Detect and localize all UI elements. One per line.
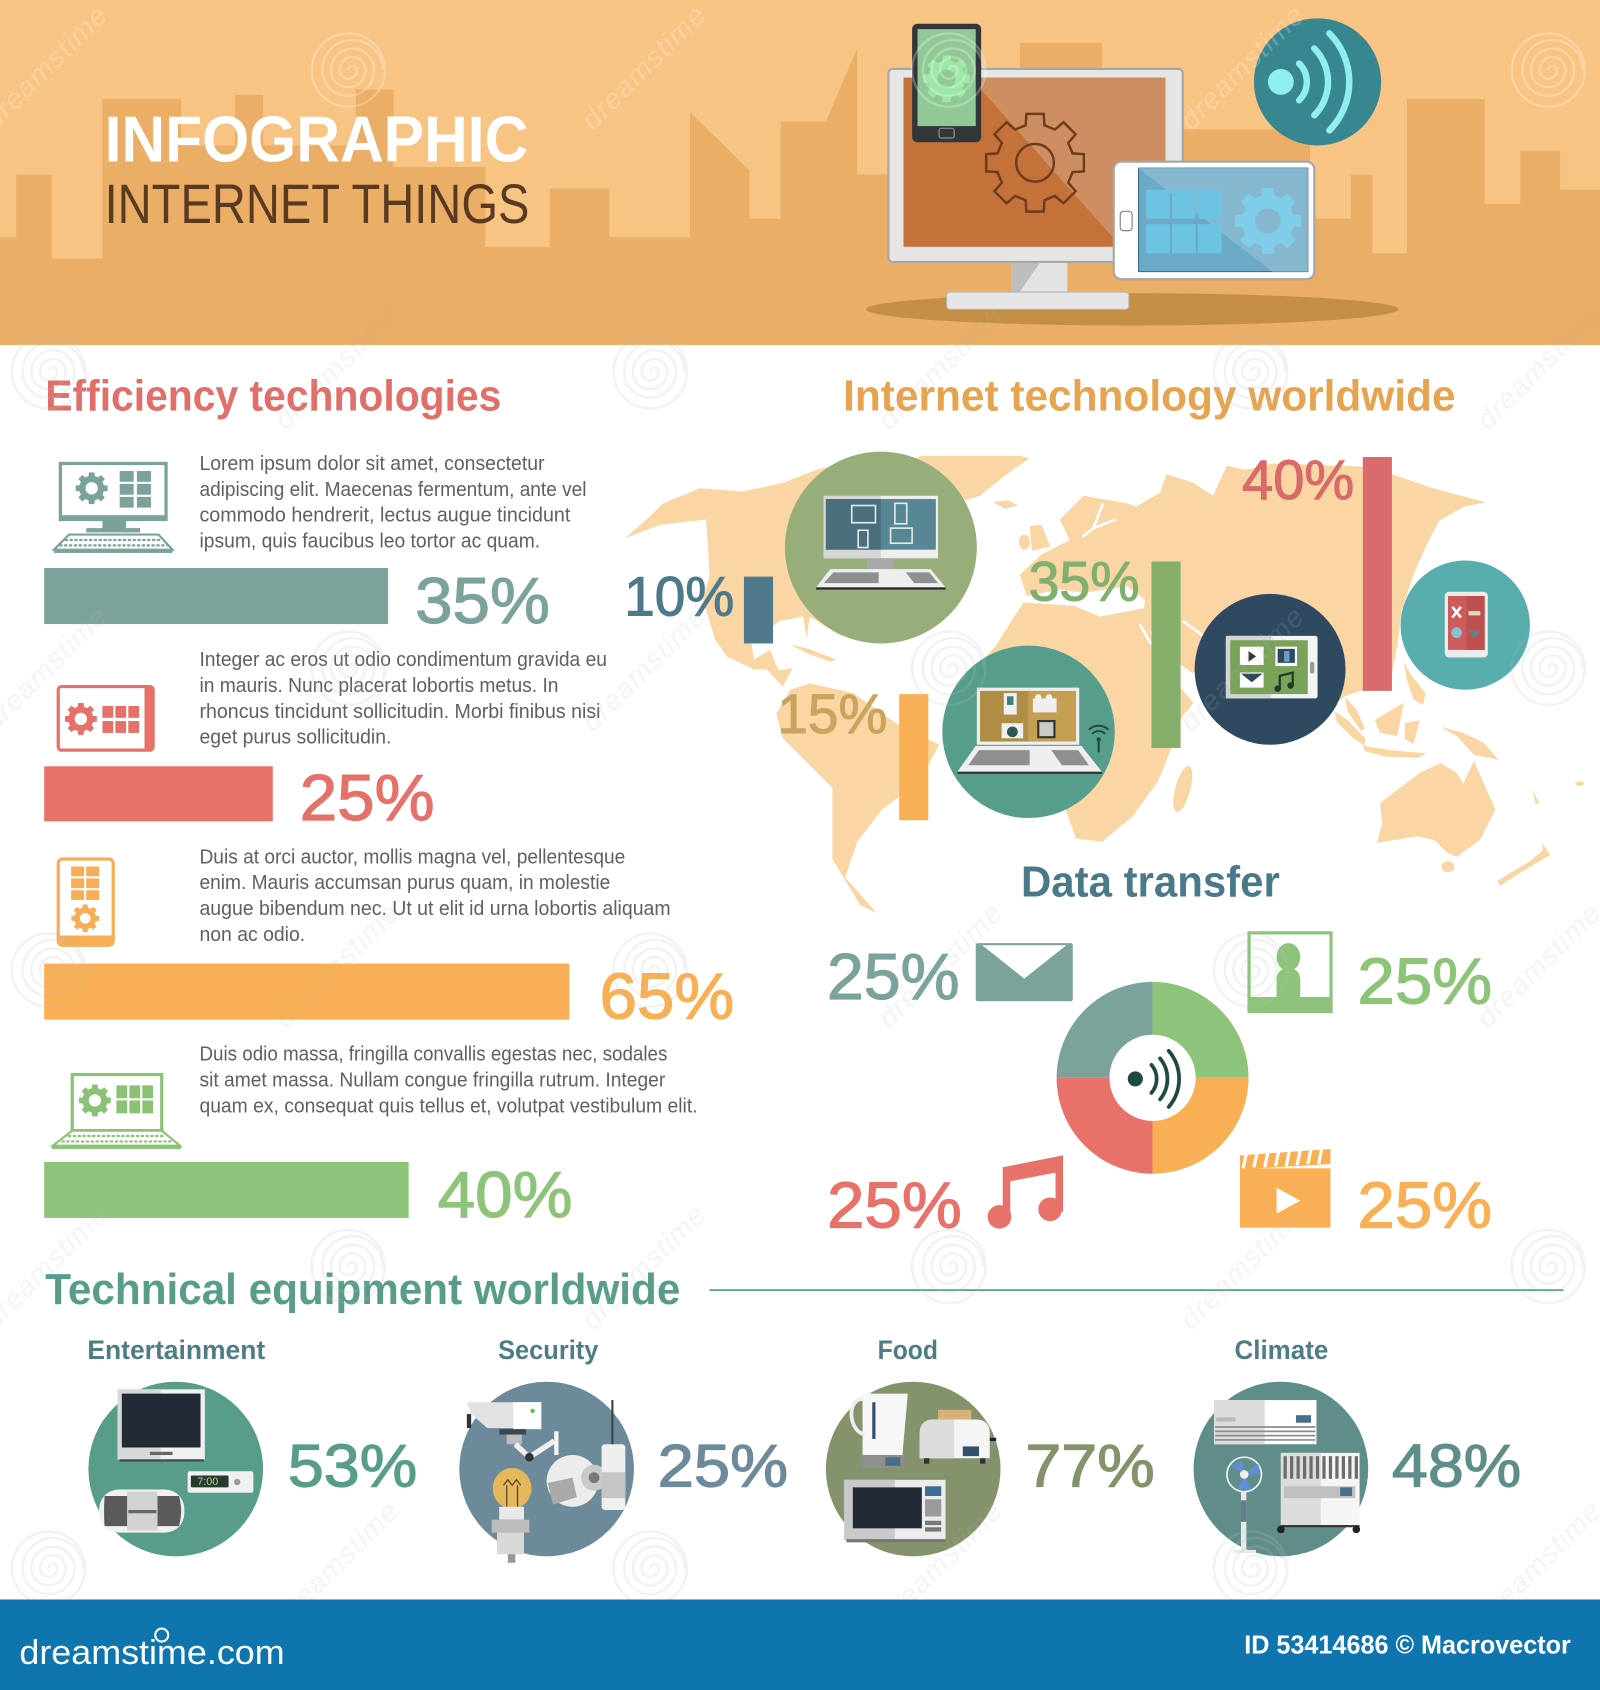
footer logo: dreamstime.com xyxy=(19,1634,285,1672)
value: 35% xyxy=(1029,549,1140,612)
map stat: africa 35% xyxy=(1029,549,1181,748)
description text: augue bibendum nec. Ut ut elit id urna lobortis aliquam xyxy=(199,897,671,920)
icon: laptop xyxy=(52,1075,181,1149)
data stat: music xyxy=(827,1155,1063,1242)
description text xyxy=(199,452,587,553)
icon: desktop monitor with gear xyxy=(888,69,1183,309)
title: INFOGRAPHIC xyxy=(105,103,528,176)
world map xyxy=(625,456,1584,913)
text: dreamstime xyxy=(872,298,1010,436)
bar xyxy=(1363,457,1392,691)
label: Entertainment xyxy=(87,1335,265,1365)
icon: music note xyxy=(988,1155,1063,1229)
icon: entertainment devices in circle xyxy=(88,1382,263,1556)
icon: desktop computer xyxy=(54,463,173,553)
text: dreamstime xyxy=(1174,0,1311,136)
label: Food xyxy=(878,1335,938,1365)
bar: 25% xyxy=(44,766,273,821)
panel: food xyxy=(826,1335,1155,1556)
bar xyxy=(899,694,928,820)
description text: sit amet massa. Nullam congue fringilla rutrum. Integer xyxy=(199,1068,665,1091)
description text: in mauris. Nunc placerat lobortis metus. In xyxy=(199,674,558,697)
value: 77% xyxy=(1025,1431,1155,1499)
icon: clapperboard xyxy=(1240,1148,1330,1228)
value: 48% xyxy=(1392,1431,1521,1499)
map stat: north america 10% xyxy=(624,564,773,643)
heading: technical equipment worldwide: Technical equipment worldwide xyxy=(45,1266,680,1314)
text: dreamstime xyxy=(575,600,713,738)
icon: envelope xyxy=(976,943,1073,1001)
description text: quam ex, consequat quis tellus et, volutpat vestibulum elit. xyxy=(199,1094,698,1117)
text: dreamstime xyxy=(268,1495,406,1632)
bar: 65% xyxy=(44,964,569,1020)
value: 25% xyxy=(658,1431,788,1499)
bar xyxy=(744,577,773,643)
panel: entertainment xyxy=(87,1335,417,1556)
panel: efficiency item 4 xyxy=(44,1043,698,1231)
value: 15% xyxy=(777,682,887,745)
footer credit: ID 53414686 © Macrovector xyxy=(1244,1631,1571,1659)
icon: tablet xyxy=(58,687,153,750)
description text xyxy=(199,1043,698,1117)
heading: data transfer: Data transfer xyxy=(1021,859,1280,907)
value: 53% xyxy=(288,1431,417,1499)
text: dreamstime xyxy=(1174,1198,1311,1336)
panel: security xyxy=(459,1335,788,1563)
description text: ipsum, quis faucibus leo tortor ac quam. xyxy=(199,530,540,553)
title: INTERNET THINGS xyxy=(105,172,529,235)
description text: Duis odio massa, fringilla convallis egestas nec, sodales xyxy=(199,1043,667,1066)
data stat: photo xyxy=(1247,931,1492,1017)
icon: navy circle with tablet xyxy=(1195,594,1346,745)
description text: non ac odio. xyxy=(199,923,305,946)
icon: wifi circle xyxy=(1254,18,1381,146)
panel: climate xyxy=(1194,1335,1521,1556)
text: dreamstime xyxy=(872,897,1010,1034)
value: 25%: 25% xyxy=(300,761,435,834)
value: 10% xyxy=(624,564,734,627)
panel: header banner xyxy=(0,0,1600,345)
value: 25% xyxy=(1357,1169,1492,1242)
value: 40%: 40% xyxy=(438,1158,573,1231)
description text: Integer ac eros ut odio condimentum gravida eu xyxy=(199,648,607,671)
value: 25% xyxy=(1357,944,1492,1017)
data stat: email xyxy=(827,940,1073,1013)
icon: smartphone with gear xyxy=(912,24,981,142)
icon: teal circle with laptop xyxy=(942,646,1115,818)
icon: tablet with tiles xyxy=(1114,162,1314,279)
device shadow xyxy=(866,293,1398,325)
panel: efficiency item 3 xyxy=(44,845,734,1033)
bar: 35% xyxy=(44,568,388,624)
text: dreamstime xyxy=(872,1495,1010,1632)
description text: Lorem ipsum dolor sit amet, consectetur xyxy=(199,452,545,475)
label: Climate xyxy=(1235,1335,1328,1365)
bar: 40% xyxy=(44,1162,409,1218)
icon: smartphone xyxy=(58,859,113,945)
description text xyxy=(199,648,607,749)
title xyxy=(105,103,529,235)
footer bar xyxy=(0,1599,1600,1690)
text: dreamstime xyxy=(575,0,713,136)
icon: climate devices in circle xyxy=(1194,1382,1368,1556)
icon: green circle with desktop xyxy=(785,452,977,643)
description text: eget purus sollicitudin. xyxy=(199,726,391,749)
icon: entertainment devices in circle: 7:00 xyxy=(197,1476,218,1488)
map stat: asia 40% xyxy=(1242,448,1392,691)
value: 40% xyxy=(1242,448,1354,511)
icon: kitchen devices in circle xyxy=(826,1382,1001,1556)
description text: Duis at orci auctor, mollis magna vel, pellentesque xyxy=(199,845,625,868)
panel: efficiency item 1 xyxy=(44,452,587,637)
bar xyxy=(1151,562,1181,748)
description text xyxy=(199,845,671,946)
value: 25% xyxy=(827,1169,962,1242)
value: 35%: 35% xyxy=(415,564,550,637)
heading: internet technology worldwide: Internet technology worldwide xyxy=(843,373,1456,421)
city skyline xyxy=(0,43,1600,345)
value: 65%: 65% xyxy=(599,960,734,1033)
description text: commodo hendrerit, lectus augue tincidunt xyxy=(199,504,571,527)
description text: adipiscing elit. Maecenas fermentum, ante vel xyxy=(199,478,587,501)
description text: enim. Mauris accumsan purus quam, in molestie xyxy=(199,871,610,894)
data stat: video xyxy=(1240,1148,1492,1242)
icon: cyan circle with phone xyxy=(1401,560,1530,690)
description text: rhoncus tincidunt sollicitudin. Morbi finibus nisi xyxy=(199,700,601,723)
heading: efficiency technologies: Efficiency technologies xyxy=(45,373,501,421)
icon: portrait photo xyxy=(1247,931,1333,1013)
panel: efficiency item 2 xyxy=(44,648,607,834)
icon: security devices in circle xyxy=(459,1382,634,1563)
text: dreamstime xyxy=(1174,600,1311,738)
value: 25% xyxy=(827,940,960,1013)
text: dreamstime xyxy=(268,298,406,436)
donut chart: data transfer xyxy=(1057,982,1249,1174)
map stat: south america 15% xyxy=(777,682,928,820)
text: dreamstime xyxy=(575,1198,713,1336)
text: dreamstime xyxy=(268,897,406,1034)
label: Security xyxy=(498,1335,598,1365)
